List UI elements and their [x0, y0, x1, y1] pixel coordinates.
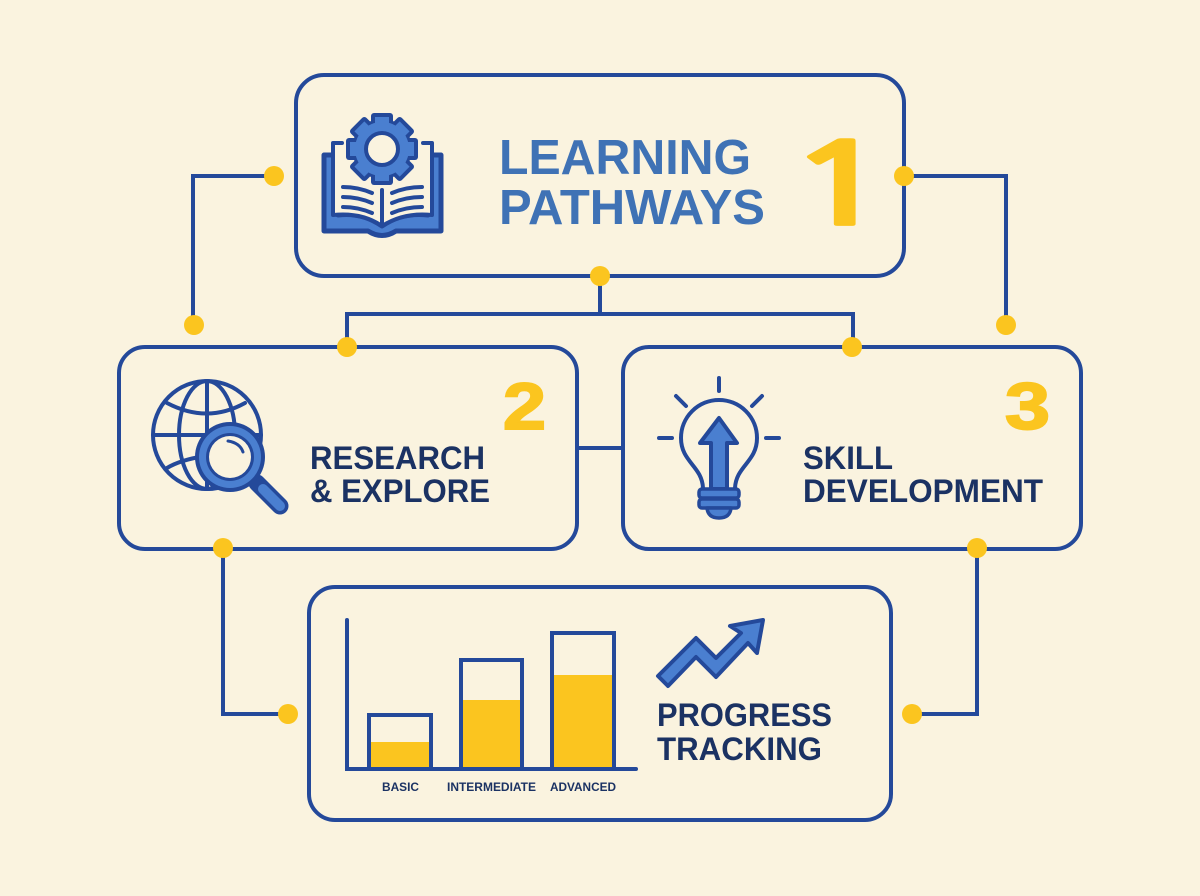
- bar labels: BASIC: [382, 780, 419, 794]
- number 3: 3: [1005, 369, 1050, 443]
- bar labels: INTERMEDIATE: [447, 780, 536, 794]
- heading: progress tracking: [657, 697, 832, 767]
- bar labels: ADVANCED: [550, 780, 616, 794]
- connector dots: [184, 166, 1016, 724]
- panel: learning pathways: [296, 75, 904, 276]
- icon: globe with magnifier: [153, 381, 280, 506]
- heading: learning pathways: PATHWAYS: [499, 181, 765, 235]
- heading: learning pathways: LEARNING: [499, 131, 751, 185]
- number 2: 2: [503, 369, 546, 443]
- heading: skill development: DEVELOPMENT: [803, 473, 1043, 509]
- panel: research and explore: [119, 347, 577, 549]
- heading: progress tracking: PROGRESS: [657, 697, 832, 733]
- heading: research and explore: [310, 440, 490, 509]
- panel: skill development: [623, 347, 1081, 549]
- icon: light bulb with arrow: [659, 378, 779, 518]
- connectors: [193, 176, 1006, 714]
- bar labels: [382, 780, 616, 794]
- heading: research and explore: RESEARCH: [310, 440, 485, 476]
- heading: research and explore: & EXPLORE: [310, 473, 490, 509]
- bar chart: [347, 620, 636, 794]
- heading: progress tracking: TRACKING: [657, 731, 822, 767]
- number 1: 1: [784, 129, 898, 242]
- icon: book with gear: [324, 113, 441, 236]
- heading: skill development: [803, 440, 1043, 509]
- panel: progress tracking: [309, 587, 891, 820]
- heading: skill development: SKILL: [803, 440, 893, 476]
- icon: rising arrow: [658, 620, 763, 686]
- heading: learning pathways: [499, 131, 765, 235]
